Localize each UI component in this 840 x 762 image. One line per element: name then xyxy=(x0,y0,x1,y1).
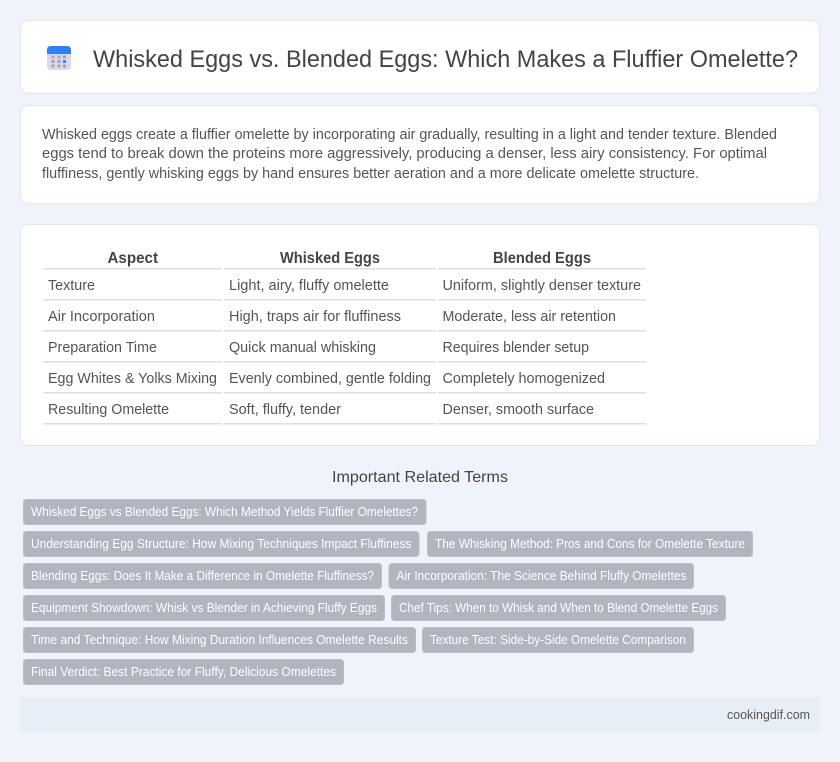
table rows: Air Incorporation xyxy=(48,309,155,325)
tag 3: The Whisking Method: Pros and Cons for Omelette Texture xyxy=(435,537,745,551)
tag 8 xyxy=(24,628,416,652)
table rows: Egg Whites & Yolks Mixing xyxy=(48,371,217,387)
tag 5: Air Incorporation: The Science Behind Fluffy Omelettes xyxy=(396,569,686,583)
tag 9: Texture Test: Side-by-Side Omelette Comparison xyxy=(430,633,686,647)
table rows: Completely homogenized xyxy=(442,371,605,387)
tag 10: Final Verdict: Best Practice for Fluffy, Delicious Omelettes xyxy=(31,665,336,679)
heading: related terms: Important Related Terms xyxy=(332,469,508,486)
table rows: Uniform, slightly denser texture xyxy=(442,278,641,294)
title: Whisked Eggs vs. Blended Eggs: Which Makes a Fluffier Omelette? xyxy=(93,46,798,73)
tag 10 xyxy=(24,660,344,684)
table header row: Aspect xyxy=(108,250,159,267)
tag 7: Chef Tips: When to Whisk and When to Blend Omelette Eggs xyxy=(399,601,718,615)
related term tags xyxy=(24,500,752,684)
tag 3 xyxy=(428,532,752,556)
table rows: Texture xyxy=(48,278,95,294)
tag 1: Whisked Eggs vs Blended Eggs: Which Method Yields Fluffier Omelettes? xyxy=(31,505,418,519)
panel: summary xyxy=(20,106,820,204)
tag 7 xyxy=(392,596,726,620)
tag 1 xyxy=(24,500,426,524)
tag 8: Time and Technique: How Mixing Duration Influences Omelette Results xyxy=(31,633,408,647)
table rows: High, traps air for fluffiness xyxy=(229,309,401,325)
text: summary paragraph: Whisked eggs create a fluffier omelette by incorporating air gradually, resulting in a light and tender texture. Blended xyxy=(42,126,777,143)
table rows: Soft, fluffy, tender xyxy=(229,402,341,418)
table rows: Light, airy, fluffy omelette xyxy=(229,278,389,294)
table rows: Quick manual whisking xyxy=(229,340,376,356)
table rows: Moderate, less air retention xyxy=(442,309,616,325)
table header row: Whisked Eggs xyxy=(280,250,380,267)
tag 5 xyxy=(389,564,694,588)
table header row: Blended Eggs xyxy=(493,250,591,267)
tag 6: Equipment Showdown: Whisk vs Blender in Achieving Fluffy Eggs xyxy=(31,601,377,615)
table rows: Denser, smooth surface xyxy=(442,402,594,418)
tag 9 xyxy=(422,628,694,652)
table header row xyxy=(108,250,591,267)
footer xyxy=(20,698,820,732)
icon: calendar xyxy=(47,46,71,70)
tag 2: Understanding Egg Structure: How Mixing Techniques Impact Fluffiness xyxy=(31,537,412,551)
footer credit: cookingdif.com xyxy=(727,707,810,722)
table rows: Preparation Time xyxy=(48,340,157,356)
table rows: Evenly combined, gentle folding xyxy=(229,371,431,387)
tag 2 xyxy=(24,532,419,556)
text: summary paragraph: fluffiness, gently whisking eggs by hand ensures better aeration and a more delicate omelette structure. xyxy=(42,165,699,182)
tag 4 xyxy=(24,564,382,588)
panel: header xyxy=(20,20,820,93)
tag 4: Blending Eggs: Does It Make a Difference in Omelette Fluffiness? xyxy=(31,569,374,583)
tag 6 xyxy=(24,596,384,620)
text: summary paragraph xyxy=(42,126,777,182)
table rows xyxy=(48,278,641,418)
panel: comparison table xyxy=(20,224,820,446)
table rows: Resulting Omelette xyxy=(48,402,169,418)
text: summary paragraph: eggs tend to break down the proteins more aggressively, producing a denser, less airy consistency. For optimal xyxy=(42,145,767,162)
table rows: Requires blender setup xyxy=(442,340,589,356)
